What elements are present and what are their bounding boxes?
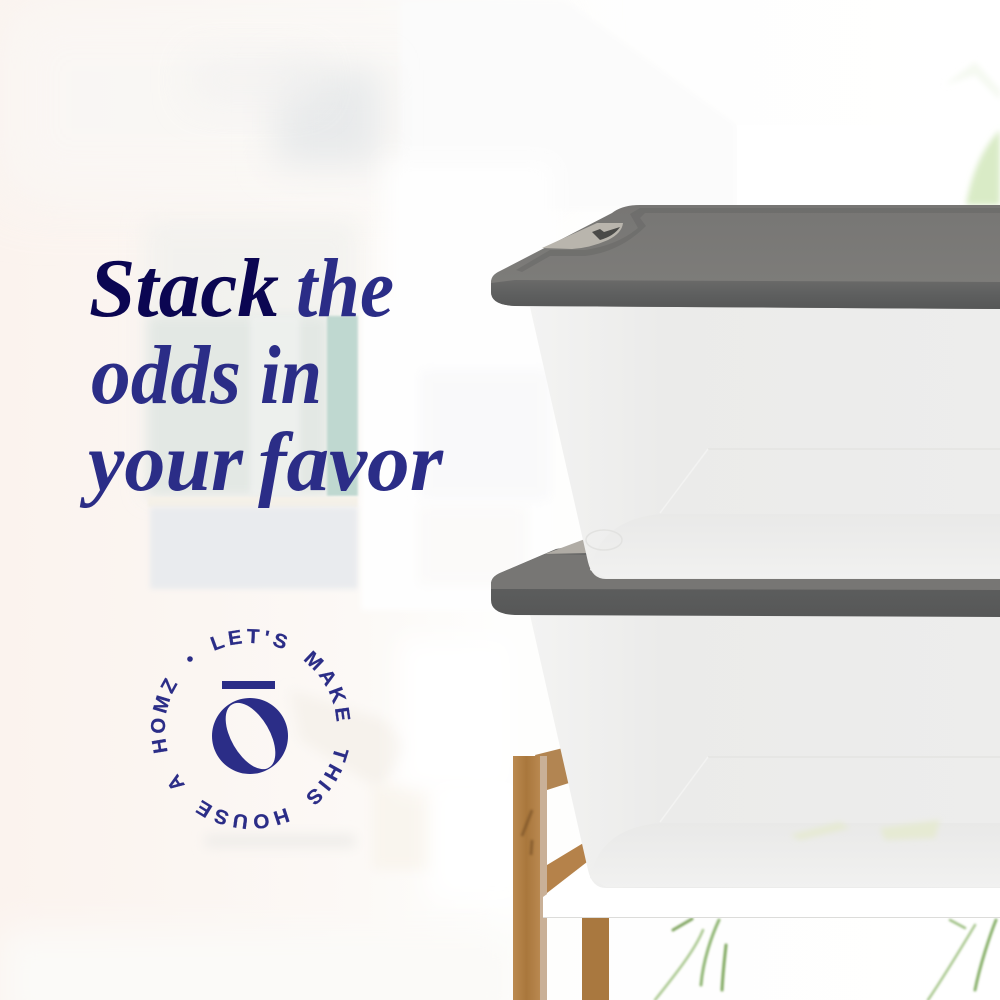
- heading: odds: [91, 329, 241, 422]
- logo ring: [212, 698, 288, 774]
- heading: your: [79, 416, 244, 509]
- logo badge: [150, 628, 350, 830]
- box body: [530, 307, 1000, 579]
- wooden shelf: [513, 748, 1000, 1000]
- heading: favor: [258, 416, 444, 509]
- circular slogan: LET'S MAKE THIS HOUSE A HOMZ: [150, 628, 350, 830]
- heading: [79, 242, 444, 509]
- heading: the: [296, 242, 394, 335]
- bottom storage box: [491, 539, 1000, 888]
- box body: [530, 615, 1000, 888]
- lid latch: [542, 223, 623, 249]
- separator dot: [187, 656, 193, 662]
- lid: [491, 541, 1000, 617]
- plant leaves bottom: [655, 919, 996, 1000]
- shelf front leg: [513, 756, 540, 1000]
- heading: Stack: [89, 242, 279, 335]
- lid: [491, 205, 1000, 309]
- plant leaves top right: [945, 62, 1000, 205]
- logo macron bar: [222, 681, 275, 689]
- heading: in: [260, 329, 322, 422]
- shelf back leg and rails: [535, 748, 569, 790]
- top storage box: [491, 205, 1000, 579]
- white shelf top: [543, 865, 1000, 917]
